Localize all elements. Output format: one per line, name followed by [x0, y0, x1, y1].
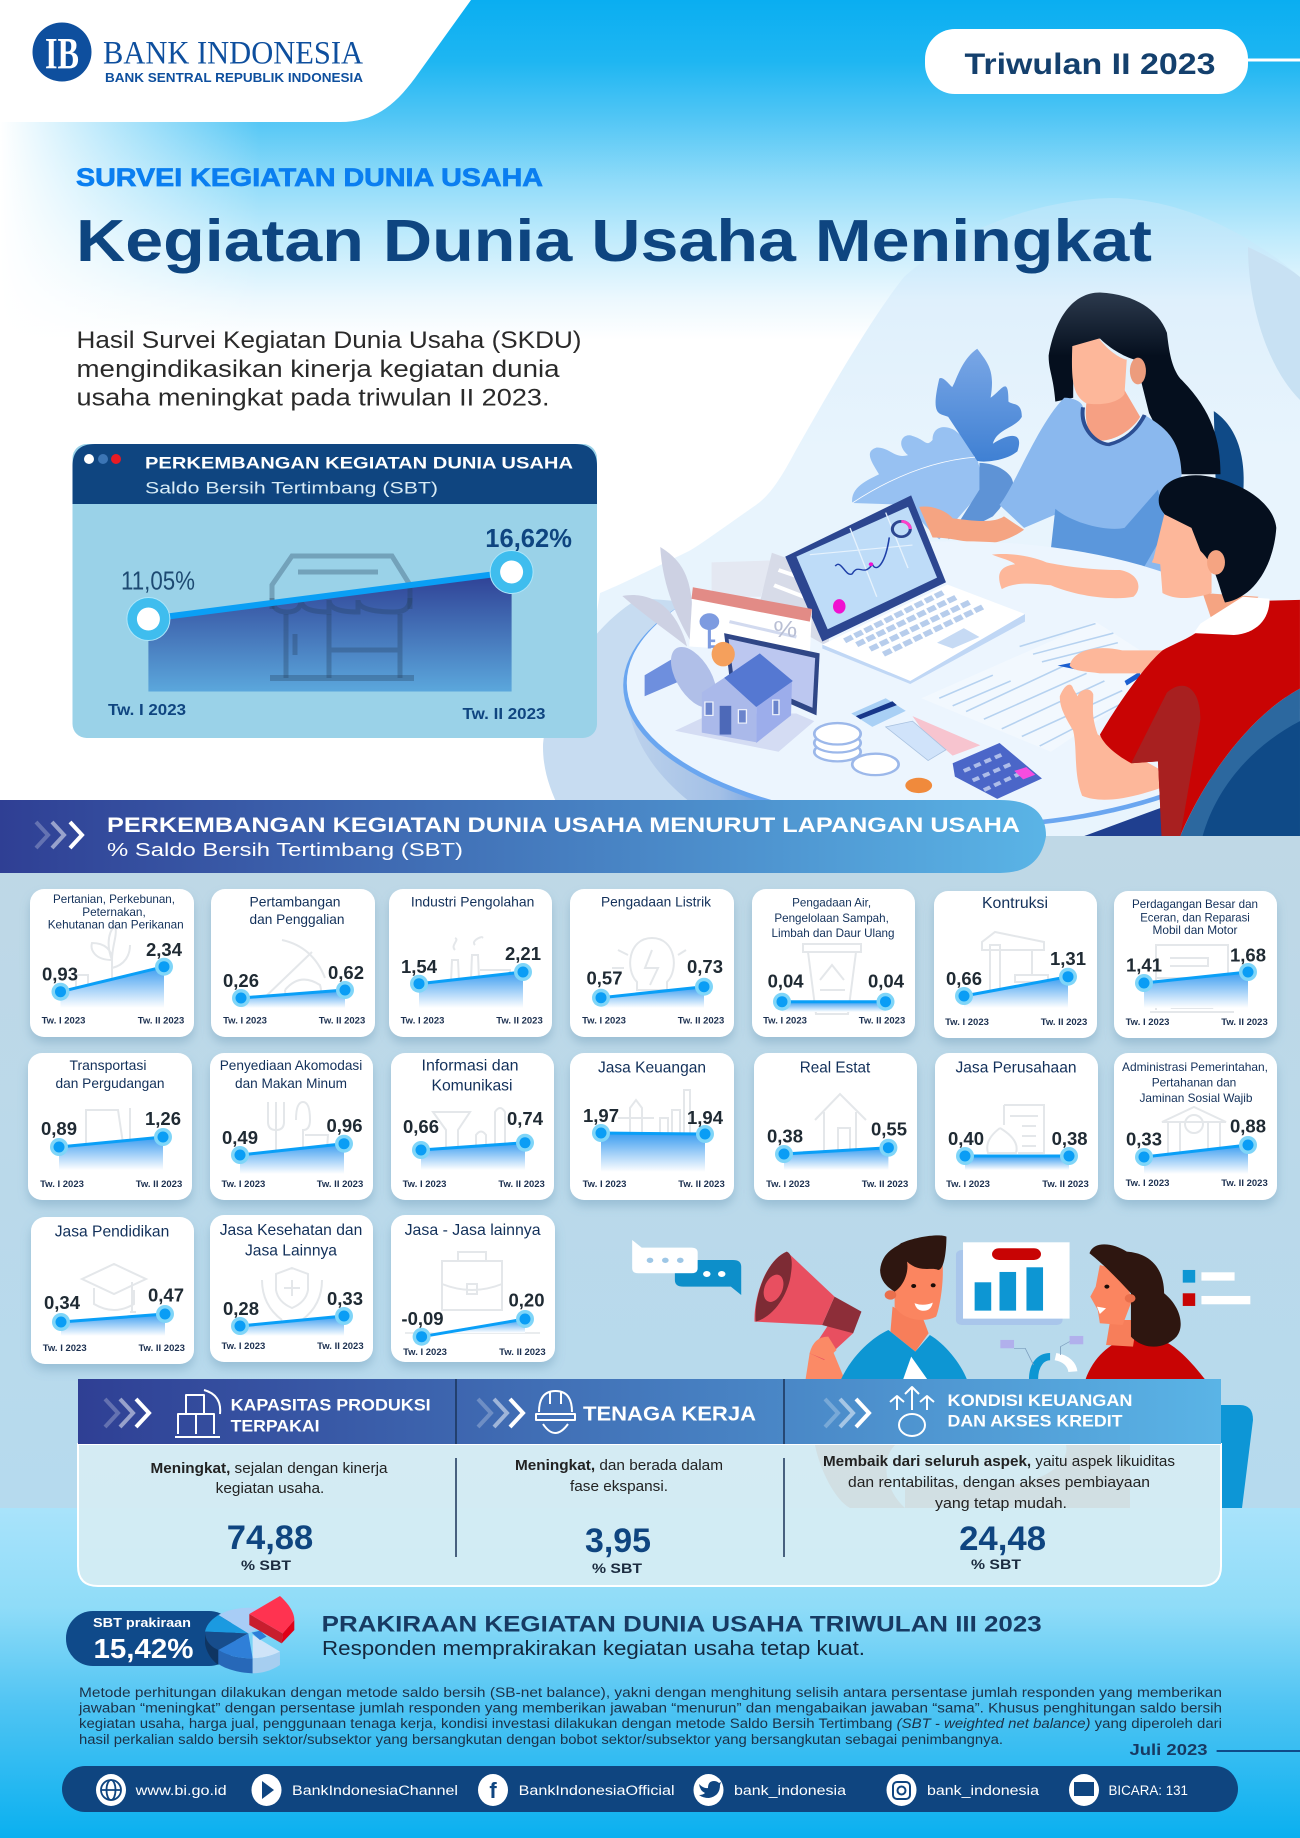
heading — [948, 1391, 1132, 1431]
chart: 0,47 — [148, 1285, 184, 1306]
donut chart — [1000, 1336, 1083, 1380]
card: Jasa Kesehatan — [210, 1215, 373, 1362]
title — [48, 892, 184, 932]
chart — [42, 939, 184, 1026]
title: Administrasi Pemerintahan, — [1122, 1060, 1268, 1074]
chart — [221, 1288, 364, 1352]
chart: Tw. II 2023 — [678, 1015, 724, 1026]
illustration: megaphone presenters — [632, 1235, 1250, 1380]
chart — [763, 971, 905, 1026]
chart: Tw. I 2023 — [401, 1015, 444, 1026]
chart: Tw. II 2023 — [499, 1347, 546, 1358]
heading: KAPASITAS PRODUKSI — [231, 1396, 431, 1415]
period badge — [925, 29, 1300, 94]
chart: -0,09 — [401, 1308, 444, 1329]
chart: 0,73 — [687, 956, 723, 977]
icon: factory gear — [175, 1390, 220, 1437]
presenter man — [841, 1235, 967, 1380]
chart — [946, 1128, 1089, 1190]
background: lower section — [0, 836, 1300, 1508]
unit: % SBT — [592, 1560, 642, 1576]
title — [1132, 897, 1258, 937]
title — [422, 1058, 518, 1095]
date: Juli 2023 — [1130, 1742, 1208, 1759]
house model — [675, 653, 814, 752]
card: Jasa Keuangan — [570, 1053, 734, 1200]
panel heading: PERKEMBANGAN KEGIATAN DUNIA USAHA — [145, 454, 573, 473]
description: yang tetap mudah. — [935, 1495, 1067, 1512]
heading — [231, 1396, 431, 1436]
value: 74,88 — [227, 1519, 313, 1557]
title: Komunikasi — [432, 1078, 512, 1095]
title: Penyediaan Akomodasi — [220, 1057, 362, 1073]
heading: TENAGA KERJA — [583, 1404, 756, 1426]
chart: Tw. I 2023 — [945, 1017, 989, 1028]
chart: Tw. II 2023 — [859, 1015, 905, 1026]
period badge: Triwulan II 2023 — [964, 48, 1216, 81]
chart legend — [1183, 1270, 1250, 1306]
column: kondisi keuangan — [823, 1387, 1175, 1572]
chat bubble blue — [675, 1260, 741, 1295]
chart: 0,38 — [1052, 1128, 1088, 1149]
title: Jasa Pendidikan — [55, 1224, 169, 1241]
twitter — [694, 1774, 847, 1806]
title — [250, 894, 344, 927]
chart: 0,88 — [1230, 1116, 1266, 1137]
card: Pertanian — [30, 889, 194, 1037]
description: kegiatan usaha. — [216, 1480, 324, 1497]
chart: Tw. I 2023 — [42, 1015, 85, 1026]
methodology note: jawaban “meningkat” dengan persentase jumlah responden yang memberikan jawaban “menurun” dan mengabaikan jawaban “sama”. Khusus penghitungan saldo bersih — [78, 1701, 1222, 1716]
icon: car repair — [1150, 945, 1234, 1012]
badge label: SBT prakiraan — [93, 1615, 191, 1630]
chart — [43, 1285, 185, 1354]
icon: finance bars — [618, 1090, 690, 1135]
methodology note: hasil perkalian saldo bersih sektor/subsektor yang bersangkutan dengan bobot sektor/subsektor yang bersangkutan sebagai penimbangnya. — [79, 1732, 1003, 1747]
badge value: 15,42% — [94, 1633, 194, 1664]
methodology note: Metode perhitungan dilakukan dengan metode saldo bersih (SB-net balance), yakni dengan menghitung selisih antara persentase jumlah responden yang memberikan — [79, 1685, 1222, 1700]
title: Perdagangan Besar dan — [1132, 897, 1258, 911]
title: Informasi dan — [422, 1058, 518, 1075]
chevrons — [105, 1399, 149, 1427]
faint figures behind panel — [815, 1445, 1130, 1508]
chart: 0,34 — [44, 1292, 81, 1313]
column: kapasitas produksi — [105, 1390, 431, 1573]
chart: 0,66 — [946, 968, 982, 989]
credit card and bills — [851, 698, 980, 761]
panel header — [78, 1379, 1221, 1444]
icon: recycle bin — [803, 944, 861, 1014]
icon: shield and hands — [262, 1268, 322, 1320]
title: Industri Pengolahan — [411, 894, 534, 910]
chart — [1126, 945, 1268, 1028]
card: Pengadaan Air — [752, 889, 915, 1037]
trend line — [148, 572, 512, 619]
plant — [852, 349, 1022, 539]
chart — [401, 1290, 546, 1358]
orange coin — [905, 778, 932, 793]
description: fase ekspansi. — [570, 1478, 668, 1495]
icon: government building — [1162, 1107, 1226, 1160]
chart: 0,04 — [868, 971, 905, 992]
chart — [766, 1119, 908, 1190]
chart: 0,57 — [586, 968, 623, 989]
website: www.bi.go.id — [134, 1783, 227, 1798]
value: 3,95 — [585, 1522, 651, 1560]
chair behind woman — [1214, 411, 1244, 497]
panel body — [72, 444, 597, 738]
chart — [403, 1108, 545, 1190]
website — [96, 1774, 227, 1806]
chart: Tw. II 2023 — [138, 1343, 185, 1354]
icon: calculator and money bag — [987, 1105, 1044, 1153]
icon: house — [803, 1094, 875, 1158]
chart: Tw. II 2023 — [678, 1179, 725, 1190]
intro text — [76, 327, 582, 412]
card: Pertambangan — [211, 889, 375, 1037]
background: darker blob under table — [543, 598, 900, 836]
icon: communication tools — [433, 1108, 505, 1155]
description — [150, 1460, 388, 1497]
unit: % SBT — [971, 1556, 1021, 1572]
section band: menurut lapangan usaha — [0, 800, 1046, 873]
facebook — [478, 1774, 675, 1806]
chart — [582, 956, 724, 1026]
axis label Tw I: Tw. I 2023 — [108, 702, 186, 719]
background: top right pale shape — [1248, 247, 1300, 400]
facebook: f — [489, 1778, 497, 1803]
panel body — [78, 1444, 1221, 1586]
title: dan Penggalian — [250, 911, 344, 927]
chart: Tw. I 2023 — [1126, 1178, 1169, 1189]
axis label Tw II: Tw. II 2023 — [462, 706, 546, 723]
panel: indicators — [78, 1379, 1221, 1586]
icon: store — [270, 556, 414, 678]
icon: light bulb — [612, 938, 686, 990]
chart: 0,33 — [327, 1288, 363, 1309]
logo: Bank Indonesia: IB — [45, 29, 79, 78]
chart: 0,38 — [767, 1126, 803, 1147]
band heading: PERKEMBANGAN KEGIATAN DUNIA USAHA MENURUT LAPANGAN USAHA — [107, 814, 1020, 837]
youtube: BankIndonesiaChannel — [292, 1783, 458, 1798]
money stack — [644, 647, 715, 707]
chart: 0,96 — [326, 1115, 363, 1136]
panel subheading: Saldo Bersih Tertimbang (SBT) — [145, 478, 438, 498]
chair behind panel — [1221, 1405, 1253, 1508]
title: dan Makan Minum — [235, 1075, 347, 1091]
chart: Tw. I 2023 — [583, 1179, 626, 1190]
intro text: mengindikasikan kinerja kegiatan dunia — [76, 356, 560, 383]
title: Pertanian, Perkebunan, — [53, 892, 175, 906]
title: Kontruksi — [982, 895, 1048, 912]
methodology note — [78, 1685, 1222, 1747]
chart: Tw. II 2023 — [496, 1015, 543, 1026]
title: dan Pergudangan — [56, 1075, 164, 1091]
card: Pengadaan Listrik — [570, 889, 734, 1037]
forecast heading: PRAKIRAAN KEGIATAN DUNIA USAHA TRIWULAN III 2023 — [322, 1611, 1042, 1636]
title: Eceran, dan Reparasi — [1140, 911, 1250, 925]
title — [220, 1222, 362, 1260]
title: Jasa - Jasa lainnya — [405, 1222, 541, 1239]
tablet — [712, 633, 820, 715]
chart: Tw. II 2023 — [317, 1179, 363, 1190]
chevrons — [478, 1399, 523, 1427]
icon: crane — [982, 932, 1048, 997]
description — [823, 1453, 1175, 1512]
description: Membaik dari seluruh aspek, yaitu aspek likuiditas — [823, 1453, 1175, 1470]
call center — [1069, 1774, 1188, 1806]
calculator — [953, 743, 1042, 799]
title: Jaminan Sosial Wajib — [1140, 1091, 1253, 1105]
chevrons — [825, 1399, 869, 1427]
chart: Tw. I 2023 — [403, 1179, 446, 1190]
chart: Tw. II 2023 — [1041, 1017, 1087, 1028]
megaphone — [754, 1252, 861, 1380]
chart: Tw. II 2023 — [1221, 1017, 1268, 1028]
chart: Tw. I 2023 — [763, 1015, 807, 1026]
chart: 0,40 — [948, 1128, 984, 1149]
forecast badge — [66, 1596, 294, 1673]
card: Perdagangan — [1114, 891, 1277, 1038]
facebook: BankIndonesiaOfficial — [519, 1783, 675, 1798]
background: white fade left — [0, 100, 260, 340]
title — [772, 896, 894, 940]
twitter: bank_indonesia — [734, 1783, 847, 1798]
chart: 1,26 — [145, 1108, 181, 1129]
description: dan rentabilitas, dengan akses pembiayaan — [848, 1474, 1150, 1491]
youtube — [252, 1774, 458, 1806]
call center: BICARA: 131 — [1108, 1783, 1188, 1798]
icon: fork and spoon — [268, 1102, 328, 1164]
background: bottom section — [0, 1508, 1300, 1838]
chart: Tw. I 2023 — [582, 1015, 626, 1026]
browser window and key: % — [773, 617, 797, 642]
chart: 0,33 — [1126, 1129, 1162, 1150]
title: Limbah dan Daur Ulang — [772, 926, 894, 940]
chart: 0,74 — [507, 1108, 544, 1129]
chart: 2,34 — [146, 939, 183, 960]
heading: KONDISI KEUANGAN — [948, 1391, 1132, 1410]
value Tw II: 16,62% — [485, 523, 572, 553]
chart: Tw. I 2023 — [766, 1179, 810, 1190]
panel: perkembangan kegiatan dunia usaha — [72, 444, 597, 738]
icon: pickaxe — [262, 940, 325, 1003]
card: Informasi — [391, 1053, 554, 1200]
title: Jasa Lainnya — [245, 1243, 337, 1260]
chart: Tw. II 2023 — [498, 1179, 545, 1190]
chart: 0,49 — [222, 1127, 258, 1148]
background: white lower area — [0, 340, 1300, 840]
description — [515, 1457, 723, 1495]
icon: briefcase — [442, 1252, 502, 1310]
title: Pengadaan Listrik — [601, 894, 712, 910]
title — [1122, 1060, 1268, 1105]
chart — [1126, 1116, 1268, 1189]
chart: 0,89 — [41, 1118, 77, 1139]
title: Real Estat — [800, 1060, 871, 1077]
chart: Tw. II 2023 — [319, 1015, 365, 1026]
card: Industri Pengolahan — [389, 889, 552, 1037]
card: Kontruksi — [934, 891, 1097, 1038]
unit: % SBT — [241, 1557, 291, 1573]
card: Jasa Perusahaan — [935, 1053, 1098, 1200]
chart: 1,68 — [1230, 945, 1266, 966]
illustration: two people at table — [622, 293, 1300, 836]
chart: 1,31 — [1050, 948, 1086, 969]
title: Jasa Kesehatan dan — [220, 1222, 362, 1239]
footer bar — [62, 1766, 1238, 1812]
title: Pengadaan Air, — [792, 896, 871, 910]
title: Kegiatan Dunia Usaha Meningkat — [76, 208, 1152, 274]
chart: 0,55 — [871, 1119, 907, 1140]
title — [56, 1057, 164, 1091]
chart: 1,41 — [1126, 955, 1162, 976]
title: Transportasi — [70, 1057, 146, 1073]
man — [1060, 475, 1300, 836]
marker Tw II — [490, 550, 533, 594]
heading: TERPAKAI — [231, 1417, 320, 1436]
chart: Tw. I 2023 — [221, 1179, 265, 1190]
chart: 0,20 — [508, 1290, 545, 1311]
chart: 1,94 — [687, 1107, 724, 1128]
woman's right arm — [992, 554, 1138, 598]
instagram: bank_indonesia — [927, 1783, 1040, 1798]
chart — [221, 1115, 363, 1190]
papers and leaves — [622, 547, 841, 647]
chart: Tw. II 2023 — [138, 1015, 184, 1026]
value Tw I: 11,05% — [121, 566, 195, 596]
title: Jasa Perusahaan — [956, 1060, 1076, 1077]
title: Pertambangan — [250, 894, 340, 910]
chart — [223, 962, 365, 1026]
instagram — [886, 1774, 1040, 1806]
marker Tw I — [127, 598, 170, 640]
card: Administrasi — [1114, 1053, 1277, 1200]
icon: pie chart — [205, 1596, 294, 1673]
chart: 0,62 — [328, 962, 364, 983]
column: tenaga kerja — [478, 1391, 756, 1576]
icon: plant in hand — [76, 925, 142, 1003]
title: Kehutanan dan Perikanan — [48, 918, 184, 932]
title: Mobil dan Motor — [1152, 923, 1238, 937]
table — [623, 541, 1291, 836]
card: Jasa lainnya — [391, 1215, 555, 1362]
chart: 2,21 — [505, 943, 541, 964]
chart: Tw. II 2023 — [317, 1341, 364, 1352]
document — [939, 623, 1140, 746]
chart: 1,97 — [583, 1105, 619, 1126]
chat bubble white — [632, 1240, 698, 1273]
chart: Tw. II 2023 — [862, 1179, 908, 1190]
icon: helmet — [536, 1391, 575, 1433]
presentation board — [956, 1242, 1070, 1325]
woman — [919, 293, 1220, 581]
logo: Bank Indonesia: BANK SENTRAL REPUBLIK INDONESIA — [105, 71, 363, 85]
chart: Tw. I 2023 — [946, 1179, 990, 1190]
card: Real Estat — [754, 1053, 917, 1200]
man's chair — [1180, 689, 1300, 836]
chart: 0,26 — [223, 970, 259, 991]
chart — [583, 1105, 725, 1190]
title: Pertahanan dan — [1152, 1076, 1236, 1090]
chart: 0,28 — [223, 1298, 259, 1319]
chart: Tw. II 2023 — [1221, 1178, 1268, 1189]
title: Peternakan, — [82, 905, 146, 919]
chart: Tw. I 2023 — [40, 1179, 84, 1190]
coins — [814, 723, 899, 775]
icon: rupiah arrows — [890, 1387, 934, 1436]
area chart — [148, 572, 512, 692]
background: pale blob behind illustration — [560, 198, 1300, 836]
panel header — [72, 444, 597, 504]
title — [220, 1057, 362, 1091]
description: Meningkat, sejalan dengan kinerja — [150, 1460, 388, 1477]
logo: Bank Indonesia — [32, 22, 363, 85]
methodology note: kegiatan usaha, harga jual, penggunaan tenaga kerja, kondisi investasi dilakukan dengan metode Saldo Bersih Tertimbang (SBT - weighted net balance) yang diperoleh dari — [79, 1716, 1222, 1731]
card: Jasa Pendidikan — [31, 1217, 194, 1364]
description: Meningkat, dan berada dalam — [515, 1457, 723, 1474]
presenter woman — [1085, 1244, 1206, 1380]
icon: chevrons — [36, 822, 82, 848]
value: 24,48 — [959, 1520, 1046, 1558]
chart — [40, 1108, 182, 1190]
forecast text: Responden memprakirakan kegiatan usaha tetap kuat. — [322, 1638, 865, 1660]
card: Transportasi — [28, 1053, 192, 1200]
laptop — [785, 495, 1025, 684]
chart: Tw. I 2023 — [403, 1347, 447, 1358]
chart: 0,93 — [42, 964, 78, 985]
chart: Tw. I 2023 — [221, 1341, 265, 1352]
icon: factory — [442, 937, 510, 1003]
background: sky gradient — [0, 0, 1300, 340]
chart: 1,54 — [401, 956, 438, 977]
intro text: usaha meningkat pada triwulan II 2023. — [76, 384, 550, 412]
chart — [401, 943, 543, 1026]
eyebrow heading: SURVEI KEGIATAN DUNIA USAHA — [76, 164, 543, 192]
chart: 0,66 — [403, 1116, 439, 1137]
chart: Tw. I 2023 — [223, 1015, 267, 1026]
header white shape — [0, 0, 471, 122]
column dividers — [456, 1379, 784, 1557]
title: Pengelolaan Sampah, — [774, 911, 889, 925]
chart: Tw. II 2023 — [1042, 1179, 1089, 1190]
band subheading: % Saldo Bersih Tertimbang (SBT) — [107, 840, 463, 860]
card: Akomodasi — [210, 1053, 373, 1200]
chart: Tw. I 2023 — [43, 1343, 87, 1354]
chart: Tw. I 2023 — [1126, 1017, 1169, 1028]
title: Jasa Keuangan — [598, 1060, 706, 1077]
window dots — [84, 454, 121, 464]
chart: Tw. II 2023 — [136, 1179, 182, 1190]
chart: 0,04 — [768, 971, 804, 992]
heading: DAN AKSES KREDIT — [948, 1412, 1123, 1431]
browser window and key — [689, 587, 812, 654]
intro text: Hasil Survei Kegiatan Dunia Usaha (SKDU) — [76, 327, 582, 354]
chart — [945, 948, 1087, 1028]
icon: forklift — [86, 1108, 148, 1163]
logo: Bank Indonesia: BANK INDONESIA — [103, 36, 363, 72]
icon: graduation cap — [82, 1264, 146, 1312]
